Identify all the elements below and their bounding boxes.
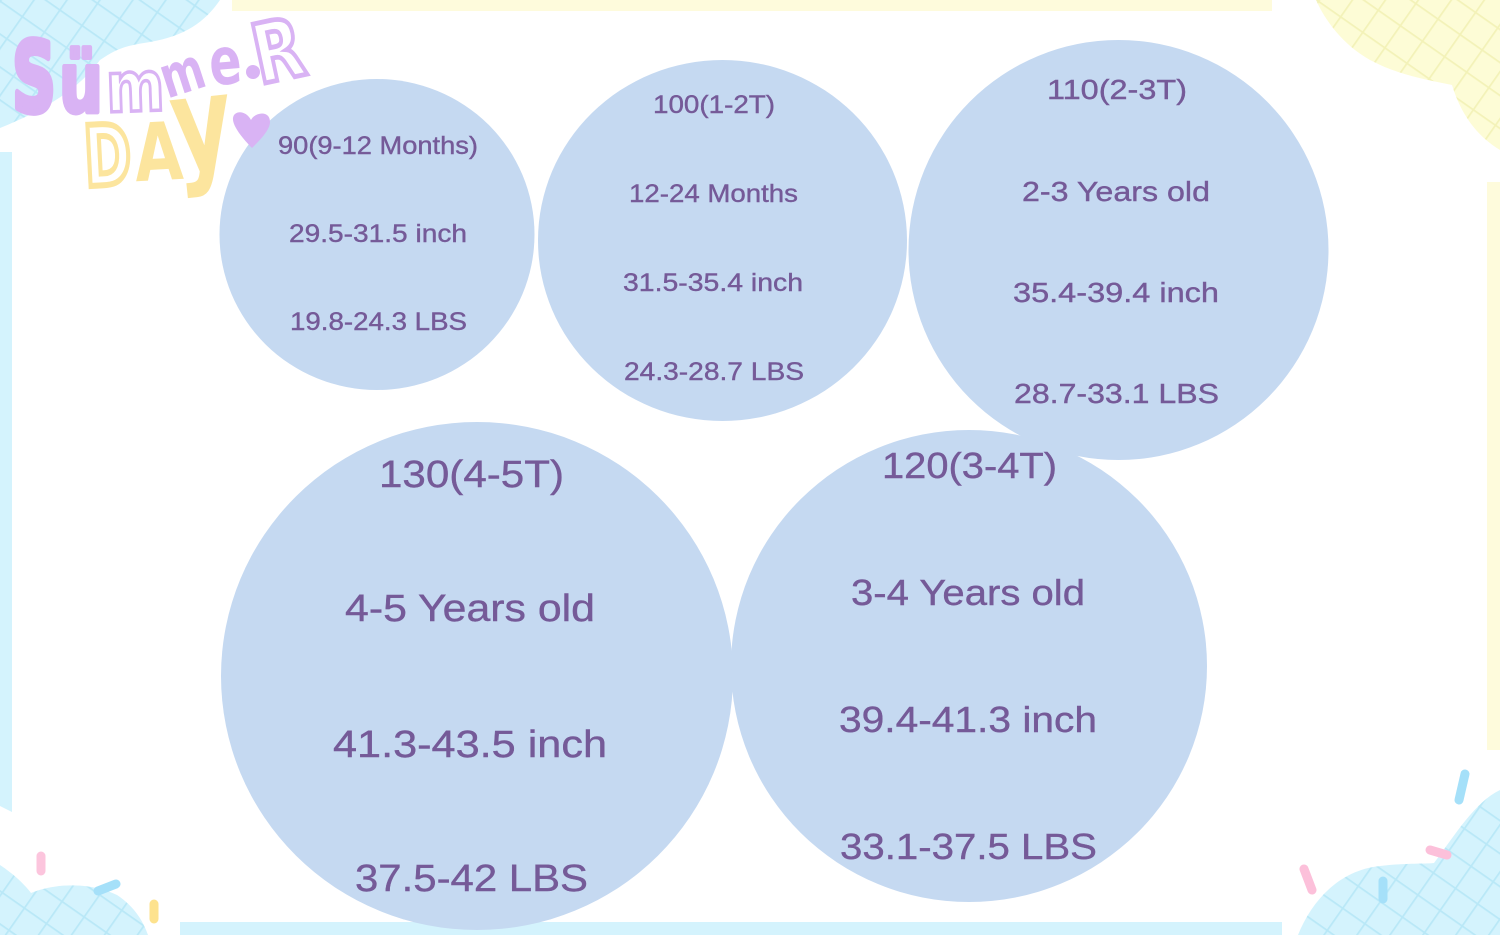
corner: bottom-left blue blob: [0, 865, 148, 935]
logo word: Summer: m: [151, 34, 213, 112]
size 100 measurements: 31.5-35.4 inch: [623, 269, 803, 297]
size 100 measurements: 12-24 Months: [629, 180, 798, 208]
size 110 measurements: 28.7-33.1 LBS: [1014, 378, 1219, 409]
size 90 label: 90(9-12 Months): [278, 132, 478, 160]
logo word: Summer: e: [206, 22, 244, 101]
size 90 measurements: [289, 220, 467, 336]
size 110 measurements: 35.4-39.4 inch: [1013, 277, 1219, 308]
size 100 label: 100(1-2T): [653, 91, 775, 119]
logo word: Day: [81, 45, 240, 206]
logo word: Summer: ü: [59, 36, 103, 133]
circle: size 130: [221, 422, 733, 930]
size 130 label: 130(4-5T): [379, 454, 564, 496]
logo word: Day: A: [132, 104, 186, 200]
circle: size 90: [220, 79, 534, 390]
size 100 measurements: [623, 180, 804, 386]
size 130 measurements: 41.3-43.5 inch: [333, 724, 607, 766]
size 130 measurements: [333, 588, 607, 900]
corner: top-left blue blob: [0, 0, 220, 128]
size 120 measurements: 33.1-37.5 LBS: [840, 826, 1097, 867]
circle: size 110: [908, 40, 1328, 460]
size 120 label: 120(3-4T): [882, 445, 1057, 486]
icon: heart: [233, 112, 270, 148]
corner: bottom-right blue blob: [1298, 790, 1500, 935]
size 90 measurements: 29.5-31.5 inch: [289, 220, 467, 248]
size 100 measurements: 24.3-28.7 LBS: [624, 358, 804, 386]
size 120 measurements: 3-4 Years old: [851, 572, 1085, 613]
size 130 measurements: 4-5 Years old: [345, 588, 595, 630]
size 110 label: 110(2-3T): [1047, 74, 1187, 105]
size 120 measurements: [839, 572, 1097, 867]
corner: top-right yellow blob: [1316, 0, 1500, 150]
circle: size 120: [731, 430, 1207, 902]
logo: Summer Day: [12, 0, 313, 206]
logo word: Summer: m: [105, 45, 166, 129]
size 90 measurements: 19.8-24.3 LBS: [290, 308, 467, 336]
size 120 measurements: 39.4-41.3 inch: [839, 699, 1097, 740]
logo word: Day: y: [163, 45, 240, 202]
circle: size 100: [538, 60, 907, 421]
size 110 measurements: 2-3 Years old: [1022, 176, 1210, 207]
size 110 measurements: [1013, 176, 1219, 409]
size 130 measurements: 37.5-42 LBS: [355, 858, 588, 900]
logo word: Day: D: [81, 106, 134, 206]
sprinkles: [41, 774, 1465, 919]
logo word: Summer: R: [243, 0, 313, 104]
logo word: Summer: S: [12, 22, 56, 134]
logo word: Summer: [12, 0, 313, 134]
